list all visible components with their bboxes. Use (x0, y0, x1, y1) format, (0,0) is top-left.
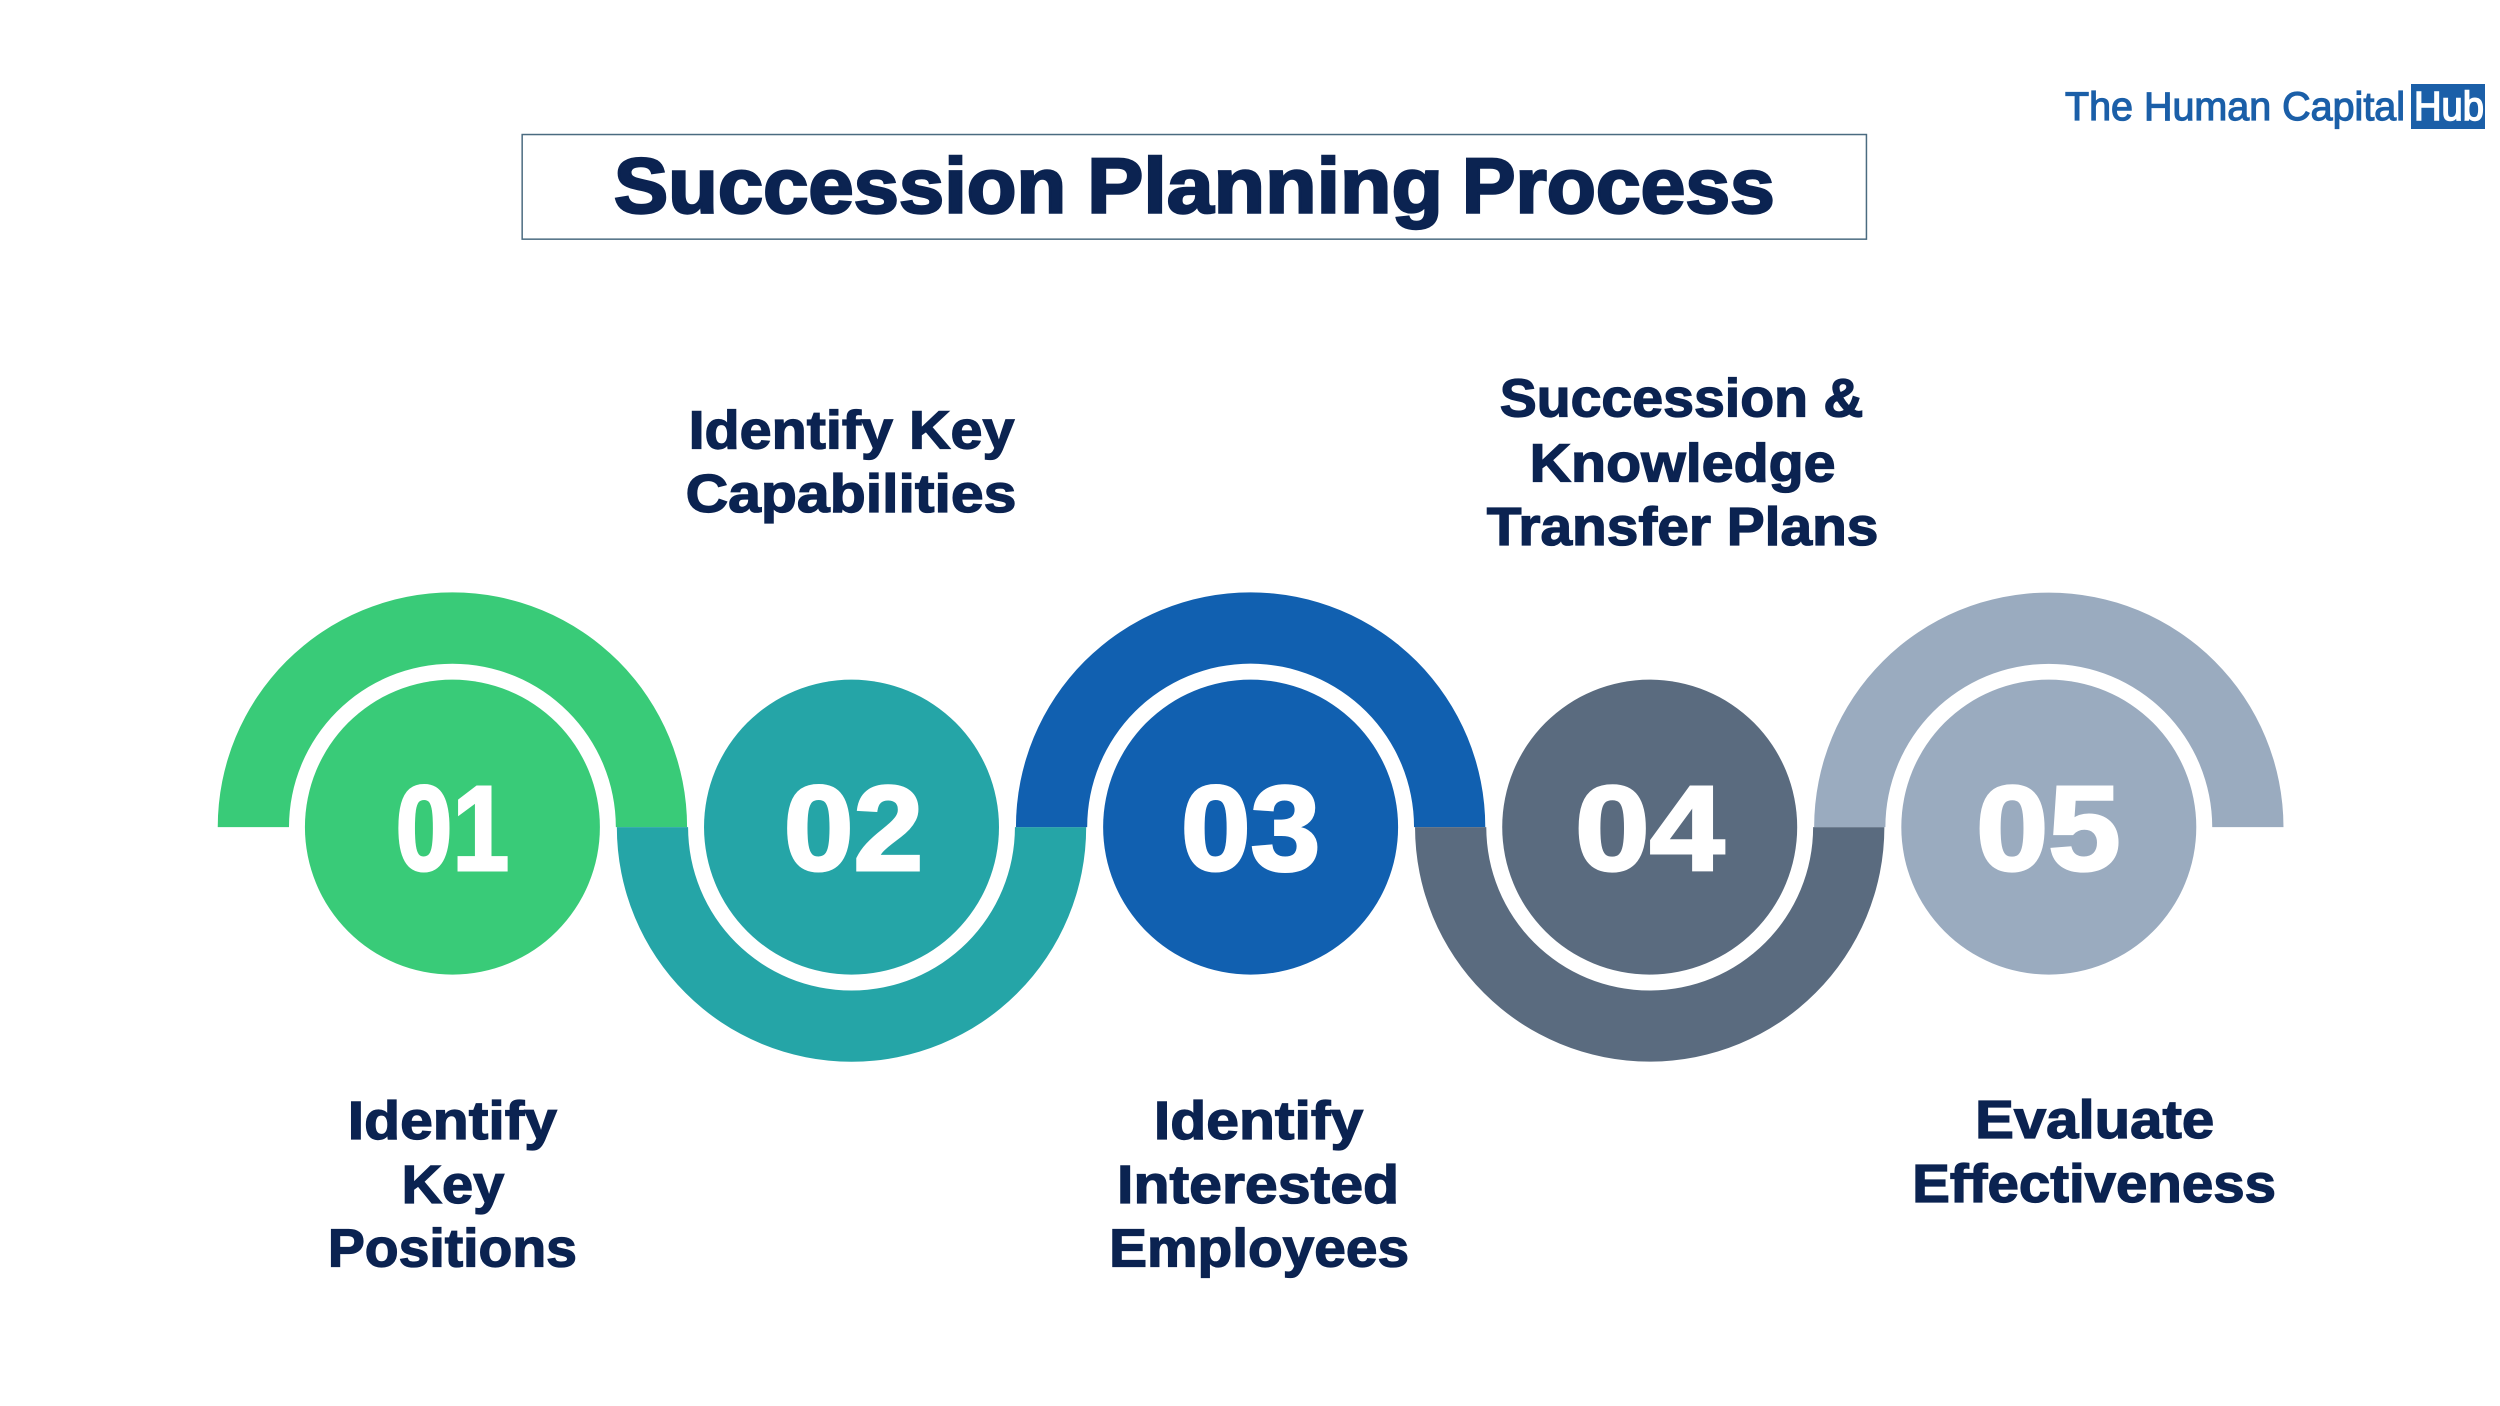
logo: The Human Capital Hub: The Human Capital (2065, 85, 2405, 129)
label: Identify Key Capabilities: Capabilities (686, 464, 1016, 524)
label: Identify Key Positions: Key (402, 1155, 504, 1215)
step 01: green arc and circle (218, 592, 687, 975)
step 02: teal arc and circle (617, 680, 1086, 1062)
label: Succession & Knowledge Transfer Plans (1487, 369, 1878, 557)
step 05: grey-blue arc and circle: 05 (1976, 761, 2121, 896)
main content group (218, 135, 2283, 1279)
label: Identify Interested Employees: Employees (1109, 1219, 1409, 1279)
label: Evaluate Effectiveness: Evaluate (1975, 1090, 2214, 1150)
title box: Planning (1087, 143, 1443, 229)
step 03: blue arc and circle: 03 (1181, 761, 1320, 896)
title box: Succession (614, 143, 1066, 229)
label: Identify Interested Employees: Identify (1154, 1091, 1363, 1151)
title box: Process (1462, 143, 1775, 229)
step 03: blue arc and circle (1016, 592, 1485, 975)
step 01: green arc and circle: 01 (396, 761, 509, 896)
label: Evaluate Effectiveness: Effectiveness (1912, 1154, 2276, 1214)
step 04: slate arc and circle (1415, 680, 1884, 1062)
step 02: teal arc and circle: 02 (784, 761, 923, 896)
label: Identify Key Positions: Identify (348, 1091, 557, 1151)
label: Succession & Knowledge Transfer Plans: Succession & (1500, 369, 1863, 429)
label: Succession & Knowledge Transfer Plans: Transfer Plans (1487, 497, 1878, 557)
label: Identify Interested Employees: Interested (1117, 1155, 1399, 1215)
label: Identify Key Capabilities (686, 400, 1016, 524)
logo: The Human Capital Hub: Hub (2414, 83, 2484, 129)
label: Identify Interested Employees (1109, 1091, 1409, 1279)
label: Succession & Knowledge Transfer Plans: Knowledge (1530, 433, 1836, 493)
label: Identify Key Positions: Positions (328, 1219, 577, 1279)
step 05: grey-blue arc and circle (1814, 593, 2283, 975)
label: Evaluate Effectiveness (1912, 1090, 2276, 1214)
label: Identify Key Capabilities: Identify Key (689, 400, 1015, 460)
title box (522, 135, 1866, 239)
label: Identify Key Positions (328, 1091, 577, 1279)
step 04: slate arc and circle: 04 (1575, 761, 1724, 896)
